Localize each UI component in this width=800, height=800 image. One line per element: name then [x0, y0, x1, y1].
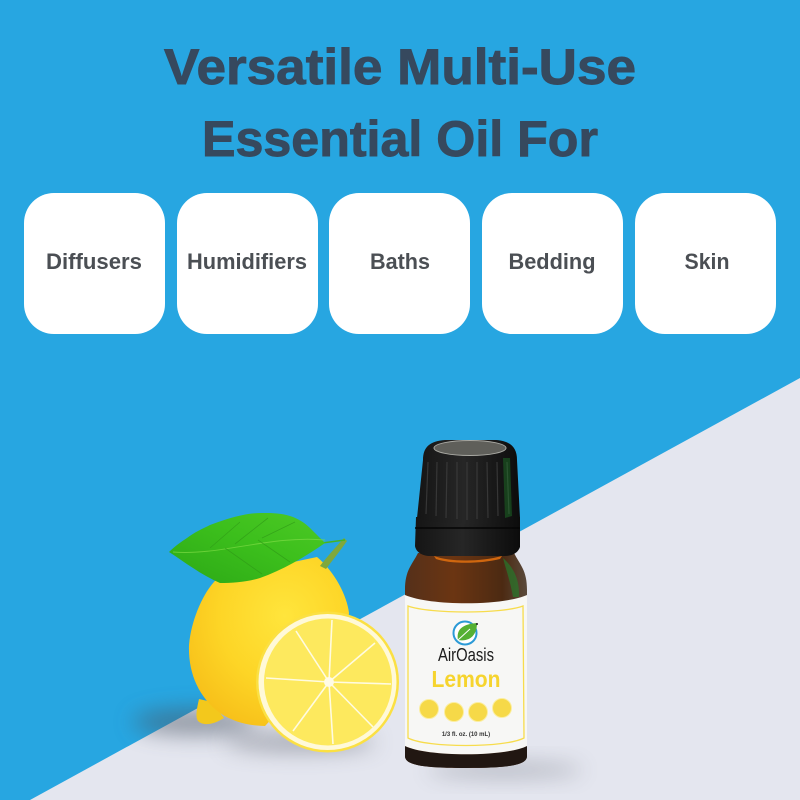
title: Versatile Multi-Use: [164, 39, 636, 95]
label yellow border: [408, 606, 524, 746]
cap top disc: [434, 440, 506, 456]
card: Humidifiers: [177, 193, 318, 334]
card: Skin: Skin: [684, 249, 730, 274]
title: Essential Oil For: [202, 111, 598, 167]
green reflection: [503, 558, 519, 597]
card: Skin: [635, 193, 776, 334]
bottle glass: [405, 553, 527, 768]
logo icon: [454, 622, 478, 644]
title: [164, 39, 636, 167]
lemon nipple: [196, 699, 224, 724]
icon: whole lemon with leaf: [169, 513, 349, 726]
card: Bedding: Bedding: [508, 249, 596, 274]
lemon body: [189, 557, 349, 726]
card: Bedding: [482, 193, 623, 334]
background: light grey diagonal: [30, 378, 800, 800]
icon: lemon slice: [256, 612, 399, 752]
leaf: [169, 513, 325, 583]
brand name: AirOasis: [438, 645, 494, 665]
badges: [420, 698, 512, 722]
bottle label: [405, 595, 527, 754]
cap lower collar: [415, 517, 520, 556]
cap green reflection: [503, 458, 512, 518]
card: Baths: [329, 193, 470, 334]
bottle: [405, 440, 527, 768]
product name: Lemon: [432, 666, 500, 692]
card: Baths: Baths: [370, 249, 430, 274]
shadows under lemon and bottle: [133, 709, 583, 776]
card: Diffusers: Diffusers: [46, 249, 142, 274]
card: Diffusers: [24, 193, 165, 334]
card: Humidifiers: Humidifiers: [187, 249, 307, 274]
stem: [320, 538, 347, 569]
cap ribbed body: [417, 440, 520, 524]
volume text: 1/3 fl. oz. (10 mL): [442, 732, 490, 738]
amber neck highlight: [434, 556, 502, 563]
